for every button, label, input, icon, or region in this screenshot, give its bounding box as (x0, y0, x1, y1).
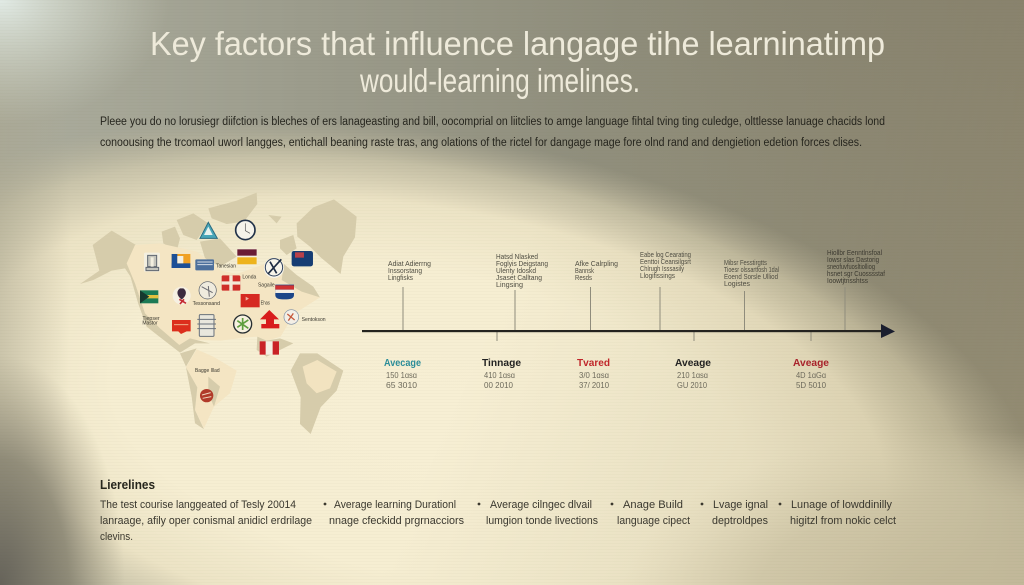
map: place labels: Mastor (142, 320, 158, 326)
world map (80, 193, 357, 434)
period 2: 410 1ɑsɑ (484, 370, 515, 380)
icon: compass badge (199, 282, 216, 299)
period 1 (384, 357, 421, 390)
milestone label 2: Hatsd Nlasked (496, 252, 538, 261)
milestone label 6: Iowsr slas Dastorig (827, 255, 879, 264)
icon: green flag (140, 290, 158, 303)
footer heading: Lierelines (100, 478, 155, 492)
milestone label 6: Hiollbr Eenntlnsfoal (827, 248, 882, 257)
icon: red medallion (200, 389, 213, 402)
milestone label 2: Foglyis Deigstang (496, 259, 548, 268)
bullet: signal: Lvage ignal (713, 499, 768, 511)
milestone label 6 (827, 248, 886, 285)
period 3: 3/0 1ɑsɑ (579, 370, 609, 380)
milestone label 6: hsnet sgr Cuosssstaf (827, 269, 886, 278)
icon: colored badge (284, 310, 299, 324)
bullet: build (611, 499, 690, 527)
title: Key factors that influence langage tihe learninatimp (150, 25, 885, 62)
milestone label 2: Ulenty Idoskd (496, 266, 536, 275)
icon: red white blue shield (275, 285, 294, 299)
milestone label 6: Ioowtjtnsshtss (827, 276, 868, 285)
milestone label 4: Llogifissings (640, 271, 675, 280)
icon: column building (144, 253, 160, 272)
icon: red white cross flag (222, 275, 240, 291)
icon: document (197, 315, 216, 336)
icon: triangle (200, 222, 217, 238)
period 2: 00 2010 (484, 380, 513, 390)
milestone label 5: Eoend Sorsle Ulliod (724, 272, 778, 281)
period 1: 150 1ɑsɑ (386, 370, 417, 380)
milestone label 3 (575, 259, 618, 282)
footer description (100, 499, 312, 543)
timeline: lower period labels (384, 357, 829, 390)
milestone label 2: Jsaset Calltang (496, 273, 542, 282)
map: place labels: Tessonsand (193, 301, 220, 307)
milestone label 2 (496, 252, 548, 289)
period 2: Tinnage (482, 357, 521, 369)
bullet: average learning duration (324, 499, 464, 527)
milestone label 5: Logistes (724, 279, 750, 288)
map: place labels: Sagaile (258, 283, 275, 289)
footer description: The test courise langgeated of Tesly 20014 (100, 499, 296, 511)
map: place labels: Ehas (261, 301, 270, 307)
footer description: clevins. (100, 531, 133, 543)
bullet: average dual: lumgion tonde livections (486, 515, 598, 527)
milestone label 2: Lingsing (496, 280, 523, 289)
period 4: Aveage (675, 357, 711, 369)
icon: speech tag (172, 320, 191, 334)
icon: clock (236, 220, 255, 240)
milestone label 3: Afke Calrpling (575, 259, 618, 268)
icon: red flag (241, 294, 260, 307)
period 5: Aveage (793, 357, 829, 369)
icon: navy flag (292, 251, 313, 266)
period 2 (482, 357, 521, 390)
milestone label 3: Bannsk (575, 266, 594, 275)
map: land masses (80, 193, 357, 434)
bullet: lowdinally (779, 499, 896, 527)
icon: blue folder (195, 259, 214, 270)
period 4: 210 1ɑsɑ (677, 370, 708, 380)
timeline: upper milestone labels (388, 248, 886, 289)
icon: blue orange flag (172, 254, 190, 268)
icon: red white flag (260, 341, 279, 355)
icon: ribbon badge (173, 287, 191, 305)
map: place labels: Tiepser (142, 316, 160, 322)
period 4 (675, 357, 711, 390)
milestone label 4 (640, 250, 692, 280)
milestone label 1 (388, 259, 431, 282)
map: place labels: Sentokson (302, 317, 326, 323)
period 5: 5D 5010 (796, 380, 826, 390)
milestone label 4: Eenttoi Ceansilgsrt (640, 257, 692, 266)
bullet: build: Anage Build (623, 499, 683, 511)
timeline (362, 248, 895, 390)
map: place labels: Bagge Illad (195, 368, 220, 374)
period 5 (793, 357, 829, 390)
icon: crossed circle (264, 258, 284, 278)
milestone label 6: sneofuvfuosltiolliog (827, 262, 875, 271)
period 1: Avecage (384, 357, 421, 369)
timeline: axis arrow (362, 324, 895, 338)
map: place labels: Tanesian (216, 263, 236, 269)
icon: green emblem (234, 315, 252, 333)
map: place labels (142, 263, 326, 374)
period 1: 65 3010 (386, 380, 417, 390)
bullet: lowdinally: higitzl from nokic celct (790, 515, 896, 527)
milestone label 1: Adiat Adierrng (388, 259, 431, 268)
period 4: GU 2010 (677, 380, 707, 390)
icon: red arrow (260, 310, 279, 328)
period 5: 4D 1ɑGɑ (796, 370, 826, 380)
period 3 (577, 357, 610, 390)
milestone label 1: Inssorstang (388, 266, 422, 275)
milestone label 4: Chlrugh Isssasily (640, 264, 684, 273)
intro paragraph: conoousing the trcomaol uworl langges, entichall beaning raste tras, ang olations of the rictel for dangage mage fore olnd rand and dengietion edetion forces clises. (100, 137, 862, 149)
map: icons (140, 220, 313, 402)
milestone label 4: Eabe log Cearating (640, 250, 691, 259)
milestone label 5: Mibsr Fesstirgtts (724, 258, 767, 267)
bullet: average learning duration: Average learning Durationl (334, 499, 456, 511)
milestone label 3: Resds (575, 273, 592, 282)
bullet: lowdinally: Lunage of lowddinilly (791, 499, 892, 511)
period 3: Tvared (577, 357, 610, 369)
timeline: vertical ticks (403, 287, 845, 341)
bullet: signal: deptroldpes (712, 515, 768, 527)
bullet: build: language cipect (617, 515, 690, 527)
title (150, 25, 885, 99)
footer section (100, 478, 896, 543)
title: would-learning imelines. (359, 62, 640, 99)
bullet: average dual: Average cilngec dlvail (490, 499, 592, 511)
intro paragraph: Pleee you do no lorusiegr diifction is bleches of ers lanageasting and bill, oocomprial on liitclies to amge language fihtal tving ting culedge, olttlesse lanuage chacids lond (100, 116, 885, 128)
icon: maroon yellow flag (237, 249, 257, 265)
milestone label 1: Lingfisks (388, 273, 413, 282)
bullet: average learning duration: nnage cfeckidd prgrnacciors (329, 515, 464, 527)
period 3: 37/ 2010 (579, 380, 609, 390)
footer description: lanraage, afily oper conismal anidicl erdrilage (100, 515, 312, 527)
bullet: signal (701, 499, 768, 527)
intro paragraph (100, 116, 885, 149)
milestone label 5 (724, 258, 779, 288)
map: place labels: Londa (242, 275, 257, 281)
milestone label 5: Tioesr olssartfosh 1dal (724, 265, 779, 274)
bullet: average dual (478, 499, 598, 527)
